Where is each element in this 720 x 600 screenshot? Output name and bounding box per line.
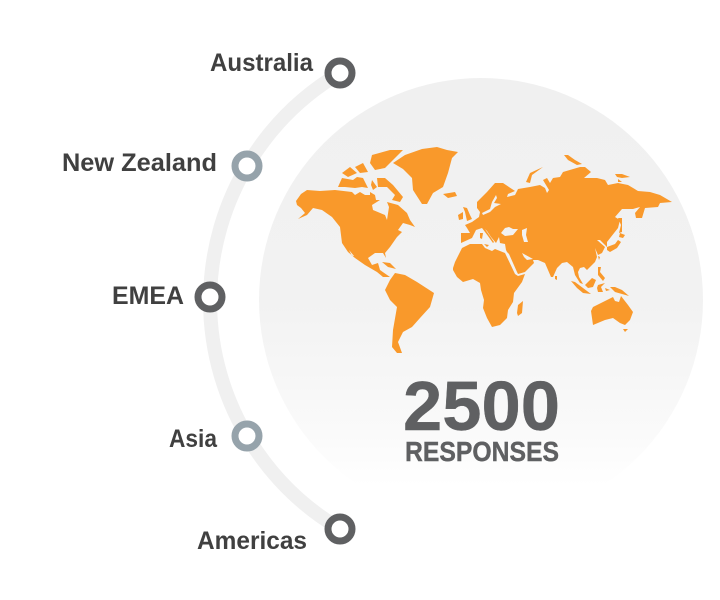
node: EMEA: EMEA (112, 282, 184, 310)
world map: Europe and Asia (443, 155, 672, 284)
curved timeline arc (210, 73, 340, 529)
node: Americas (197, 517, 352, 555)
world map: Americas and Greenland (296, 147, 458, 353)
label RESPONSES: RESPONSES (405, 436, 559, 467)
world map: Southeast Asia and Oceania (555, 256, 633, 332)
node: Asia (169, 424, 259, 453)
node: Americas: Americas (197, 527, 307, 555)
number 2500: 2500 (403, 367, 560, 445)
node: New Zealand: New Zealand (62, 149, 217, 177)
node: Australia (210, 49, 352, 85)
total count: 2500 responses (403, 367, 560, 467)
node: Australia: Australia (210, 49, 314, 77)
node: Asia: Asia (169, 425, 218, 453)
globe background circle (259, 78, 703, 522)
world map: Africa (453, 244, 525, 327)
node: EMEA (112, 282, 222, 310)
